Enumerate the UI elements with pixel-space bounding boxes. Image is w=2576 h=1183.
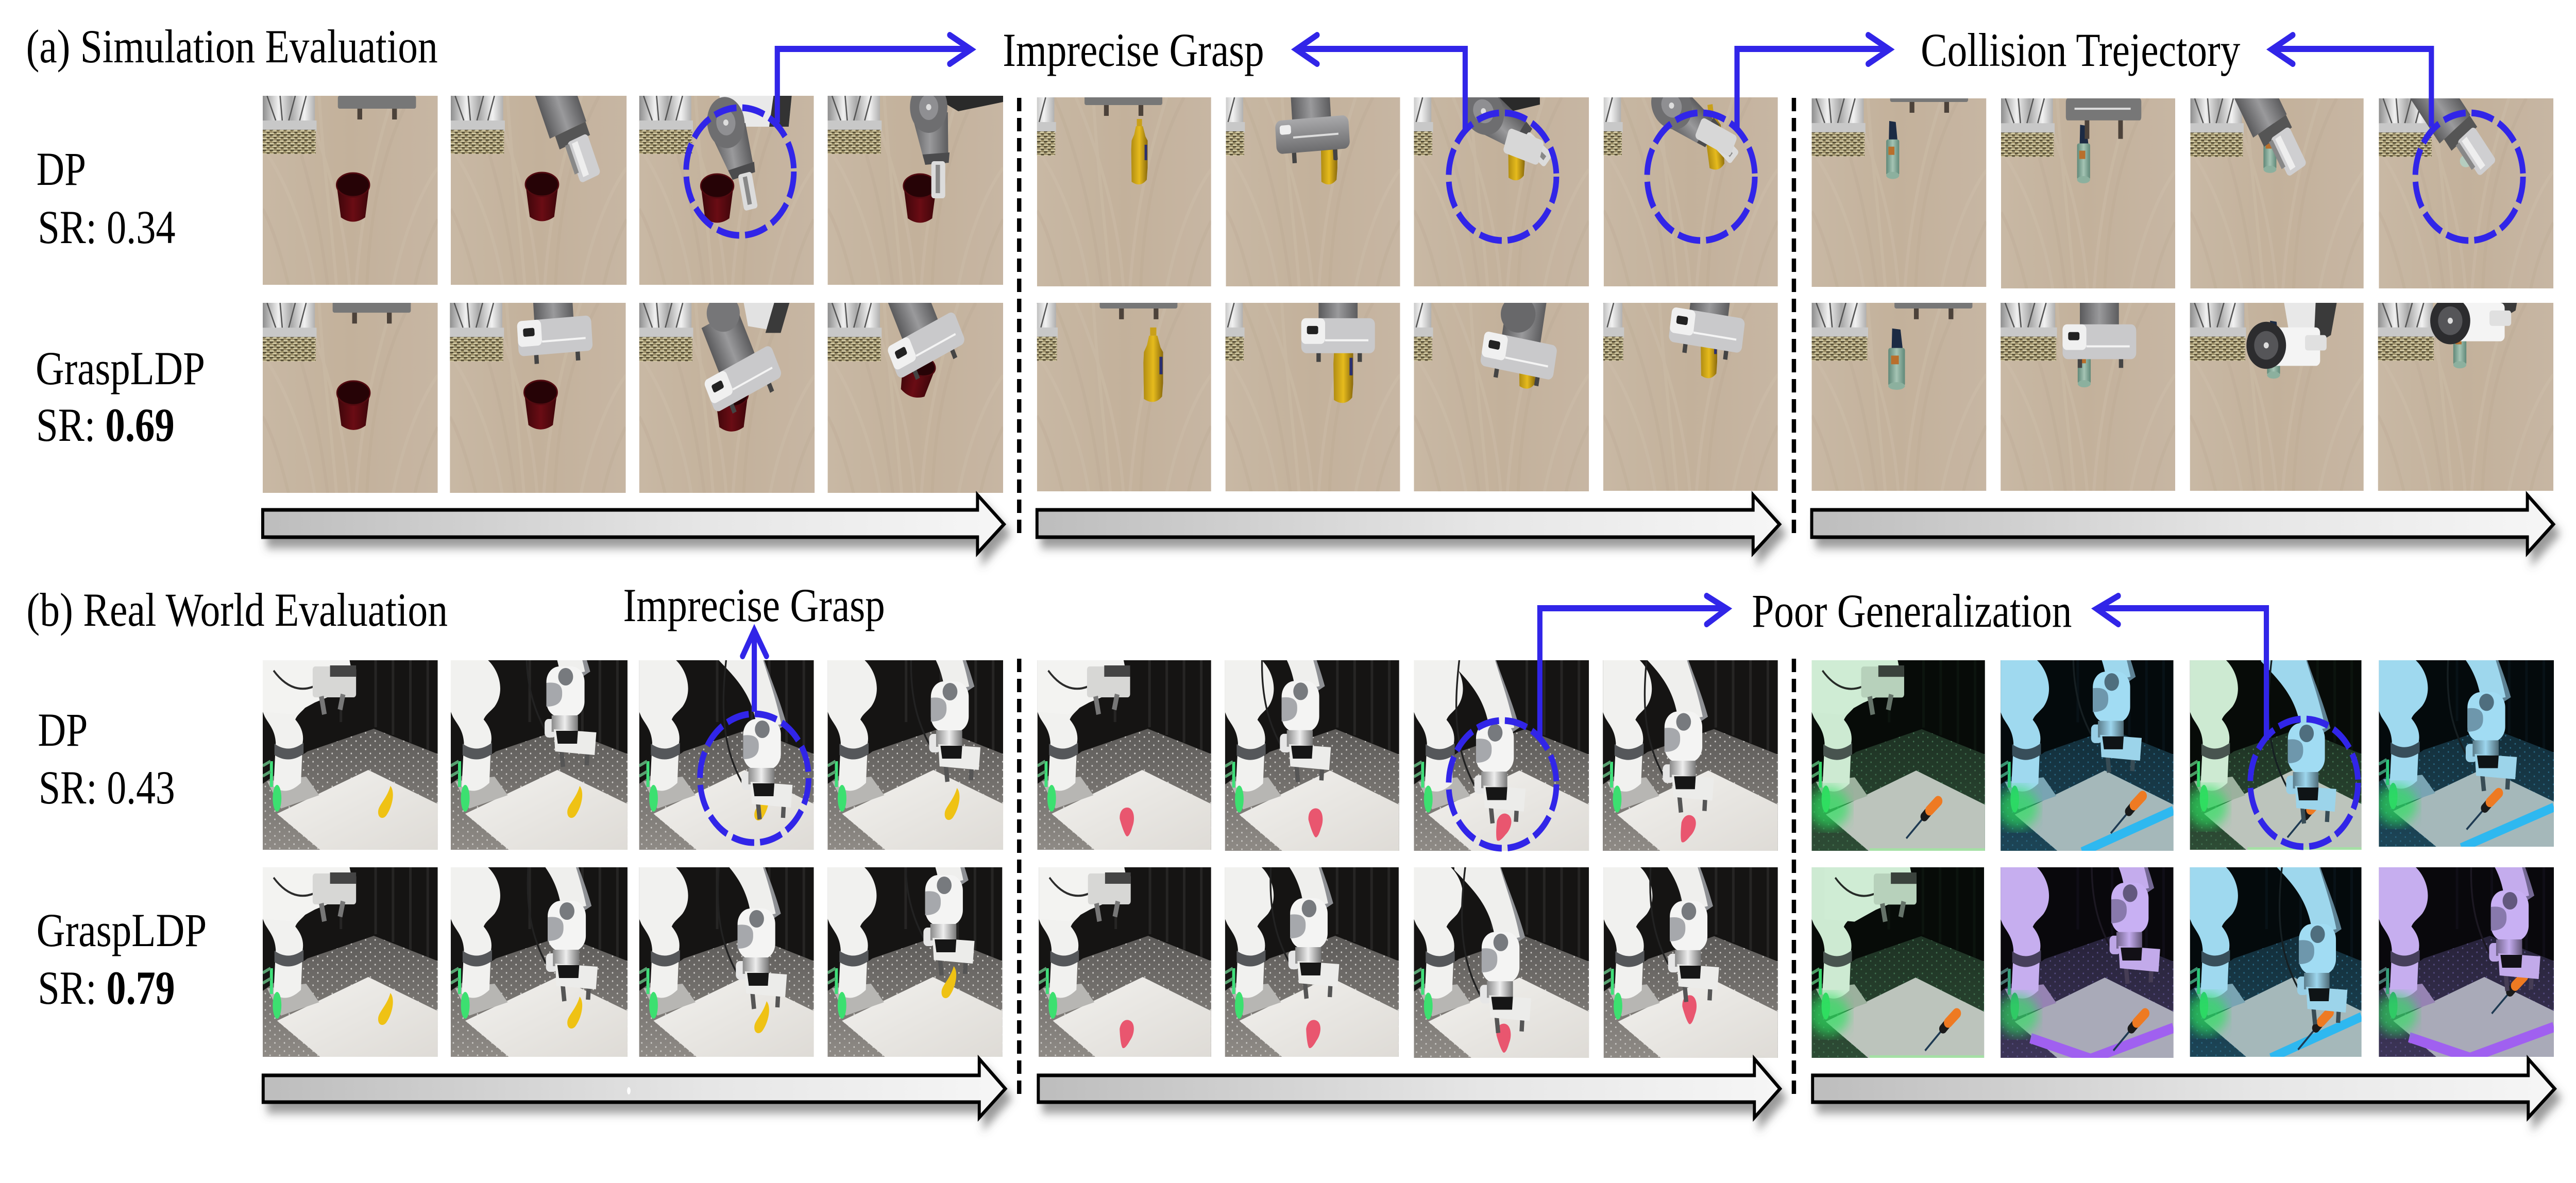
arrow: to Collision Trejectory from left xyxy=(1737,35,1889,130)
label: GraspLDP sim success rate: SR: 0.69 xyxy=(36,399,175,452)
frame: DP sim tube step 3 xyxy=(2191,65,2364,290)
arrow: to Poor Generalization from left xyxy=(1540,596,1727,740)
frame: GraspLDP real screwdriver step 2 purple light xyxy=(1997,759,2174,1059)
frame: DP real screwdriver step 4 cyan light xyxy=(2376,571,2554,848)
frame: GraspLDP real pepper step 2 xyxy=(1225,775,1399,1058)
frame: GraspLDP sim tube step 4 xyxy=(2378,275,2553,492)
arrow: progress, sim group 1 xyxy=(263,495,1004,553)
frame: GraspLDP sim bottle step 2 xyxy=(1225,303,1400,491)
frame: GraspLDP real screwdriver step 3 cyan light xyxy=(2187,800,2362,1058)
frame: DP sim tube step 1 xyxy=(1811,98,1987,287)
frame: GraspLDP real pepper step 1 xyxy=(1039,867,1211,1058)
arrow: to Collision Trejectory from right xyxy=(2272,35,2431,127)
frame: DP sim bottle step 2 xyxy=(1226,97,1400,286)
frame: GraspLDP real banana step 3 xyxy=(639,785,814,1058)
frame: GraspLDP sim cup step 1 xyxy=(263,303,438,493)
label: DP sim: DP xyxy=(37,143,86,196)
frame: GraspLDP real screwdriver step 4 purple light xyxy=(2376,767,2554,1058)
arrow: progress, sim group 2 xyxy=(1037,495,1780,553)
heading: simulation evaluation: (a) Simulation Evaluation xyxy=(26,21,438,73)
frame: GraspLDP sim bottle step 3 xyxy=(1414,303,1589,491)
label: GraspLDP real: GraspLDP xyxy=(37,904,207,957)
frame: DP real banana step 4 xyxy=(828,558,1003,851)
frame: DP sim cup step 2 xyxy=(450,96,626,285)
frame: DP real screwdriver step 3 cyan light xyxy=(2187,599,2362,851)
arrow: to Imprecise Grasp from left xyxy=(777,35,971,123)
callout label: imprecise grasp sim: Imprecise Grasp xyxy=(1003,24,1264,77)
callout circles: failure highlights xyxy=(686,108,2523,848)
arrow: up to Imprecise Grasp (real) xyxy=(742,630,767,712)
frame: DP real banana step 2 xyxy=(451,543,628,851)
panel: real world frames, group 2 (pepper) xyxy=(1038,557,1778,1059)
label: DP real success rate: SR: 0.43 xyxy=(39,762,175,814)
frame: DP sim cup step 3 xyxy=(639,96,814,285)
frame: DP sim bottle step 4 xyxy=(1603,97,1778,286)
arrow: to Poor Generalization from right xyxy=(2096,596,2266,740)
frame: DP sim bottle step 1 xyxy=(1037,97,1211,286)
panel: real world frames, group 3 (screwdriver, changing light) xyxy=(1808,547,2554,1059)
arrow: progress, real group 2 xyxy=(1038,1059,1780,1118)
frame: GraspLDP sim cup step 3 xyxy=(639,303,815,493)
callout label: collision trajectory: Collision Trejectory xyxy=(1921,24,2241,77)
frame: GraspLDP real banana step 2 xyxy=(451,777,628,1058)
callout label: poor generalization: Poor Generalization xyxy=(1752,585,2072,638)
callout label: imprecise grasp real: Imprecise Grasp xyxy=(623,579,885,632)
panel: simulation frames, group 2 (bottle) xyxy=(1003,66,1778,493)
frame: GraspLDP sim tube step 3 xyxy=(2190,299,2364,492)
arrow: progress, real group 3 xyxy=(1812,1059,2555,1118)
frame: DP real pepper step 3 xyxy=(1414,598,1589,852)
divider group: dashed separators xyxy=(1019,98,1794,1095)
frame: GraspLDP sim bottle step 1 xyxy=(1037,303,1211,491)
frame: GraspLDP sim cup step 2 xyxy=(450,303,626,493)
frame: DP real banana step 1 xyxy=(263,660,438,851)
arrow: progress, sim group 3 xyxy=(1812,495,2553,553)
frame: GraspLDP sim tube step 2 xyxy=(2001,276,2175,492)
frame: DP real pepper step 4 xyxy=(1603,587,1778,852)
label: DP real: DP xyxy=(38,704,88,757)
frame: GraspLDP sim bottle step 4 xyxy=(1603,303,1778,491)
frame: DP sim tube step 4 xyxy=(2379,70,2553,290)
arrow: progress, real group 1 xyxy=(263,1059,1005,1118)
frame: DP sim cup step 1 xyxy=(263,96,438,285)
frame: DP sim bottle step 3 xyxy=(1414,97,1589,286)
frame: DP real banana step 3 xyxy=(639,595,814,851)
frame: GraspLDP sim tube step 1 xyxy=(1812,296,1986,492)
arrow: to Imprecise Grasp from right xyxy=(1296,35,1465,130)
frame: GraspLDP real screwdriver step 1 green light xyxy=(1808,867,1984,1059)
heading: real world evaluation: (b) Real World Evaluation xyxy=(26,584,448,637)
frame: DP real pepper step 2 xyxy=(1225,557,1399,852)
label: GraspLDP sim: GraspLDP xyxy=(36,342,205,395)
panel: real world frames, group 1 (banana) xyxy=(263,543,1003,1058)
frame: DP real pepper step 1 xyxy=(1038,660,1211,851)
frame: DP real screwdriver step 2 cyan light xyxy=(1997,547,2174,852)
panel: simulation frames, group 1 (cup) xyxy=(263,69,1003,494)
frame: DP sim cup step 4 xyxy=(827,96,1003,285)
frame: GraspLDP sim cup step 4 xyxy=(827,303,1003,493)
label: DP sim success rate: SR: 0.34 xyxy=(38,201,176,254)
frame: GraspLDP real pepper step 3 xyxy=(1414,808,1589,1059)
frame: GraspLDP real banana step 1 xyxy=(263,867,438,1058)
frame: DP sim tube step 2 xyxy=(2001,98,2175,290)
panel: simulation frames, group 3 (tube) xyxy=(1812,65,2553,492)
frame: GraspLDP real banana step 4 xyxy=(828,751,1002,1058)
frame: DP real screwdriver step 1 green light xyxy=(1808,660,1985,852)
label: GraspLDP real success rate: SR: 0.79 xyxy=(38,962,175,1015)
frame: GraspLDP real pepper step 4 xyxy=(1604,777,1778,1059)
